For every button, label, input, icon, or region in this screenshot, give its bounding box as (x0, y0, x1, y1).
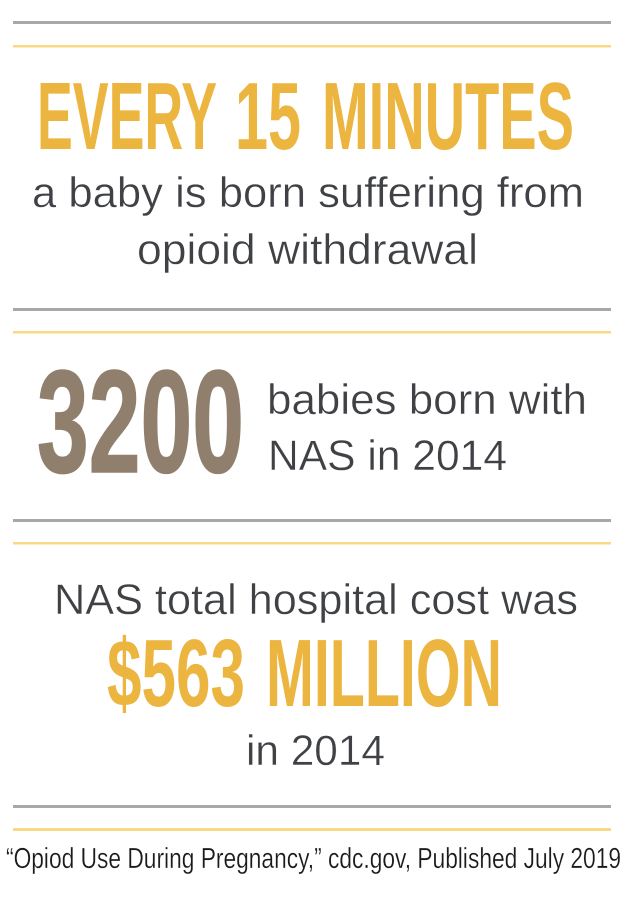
big number: 563 million (107, 620, 502, 727)
panel: every 15 minutes (32, 63, 584, 274)
text: NAS in 2014: NAS in 2014 (268, 432, 507, 480)
heading: every 15 minutes: EVERY (37, 63, 217, 170)
text: NAS total hospital cost: NAS total hospital cost was (54, 576, 578, 624)
big number: 563 million: $563 (107, 620, 245, 727)
text: babies born with: babies born with (267, 376, 587, 424)
text: opioid withdrawal: opioid withdrawal (137, 226, 478, 274)
heading: every 15 minutes (37, 63, 574, 170)
heading: every 15 minutes: 15 (235, 63, 301, 170)
text: baby born suffering: a baby is born suffering from (32, 169, 584, 217)
panel: 3200 babies (37, 340, 587, 503)
big number: 3200: 3200 (37, 340, 244, 503)
text: in 2014: in 2014 (246, 727, 385, 775)
panel: hospital cost (54, 576, 578, 775)
